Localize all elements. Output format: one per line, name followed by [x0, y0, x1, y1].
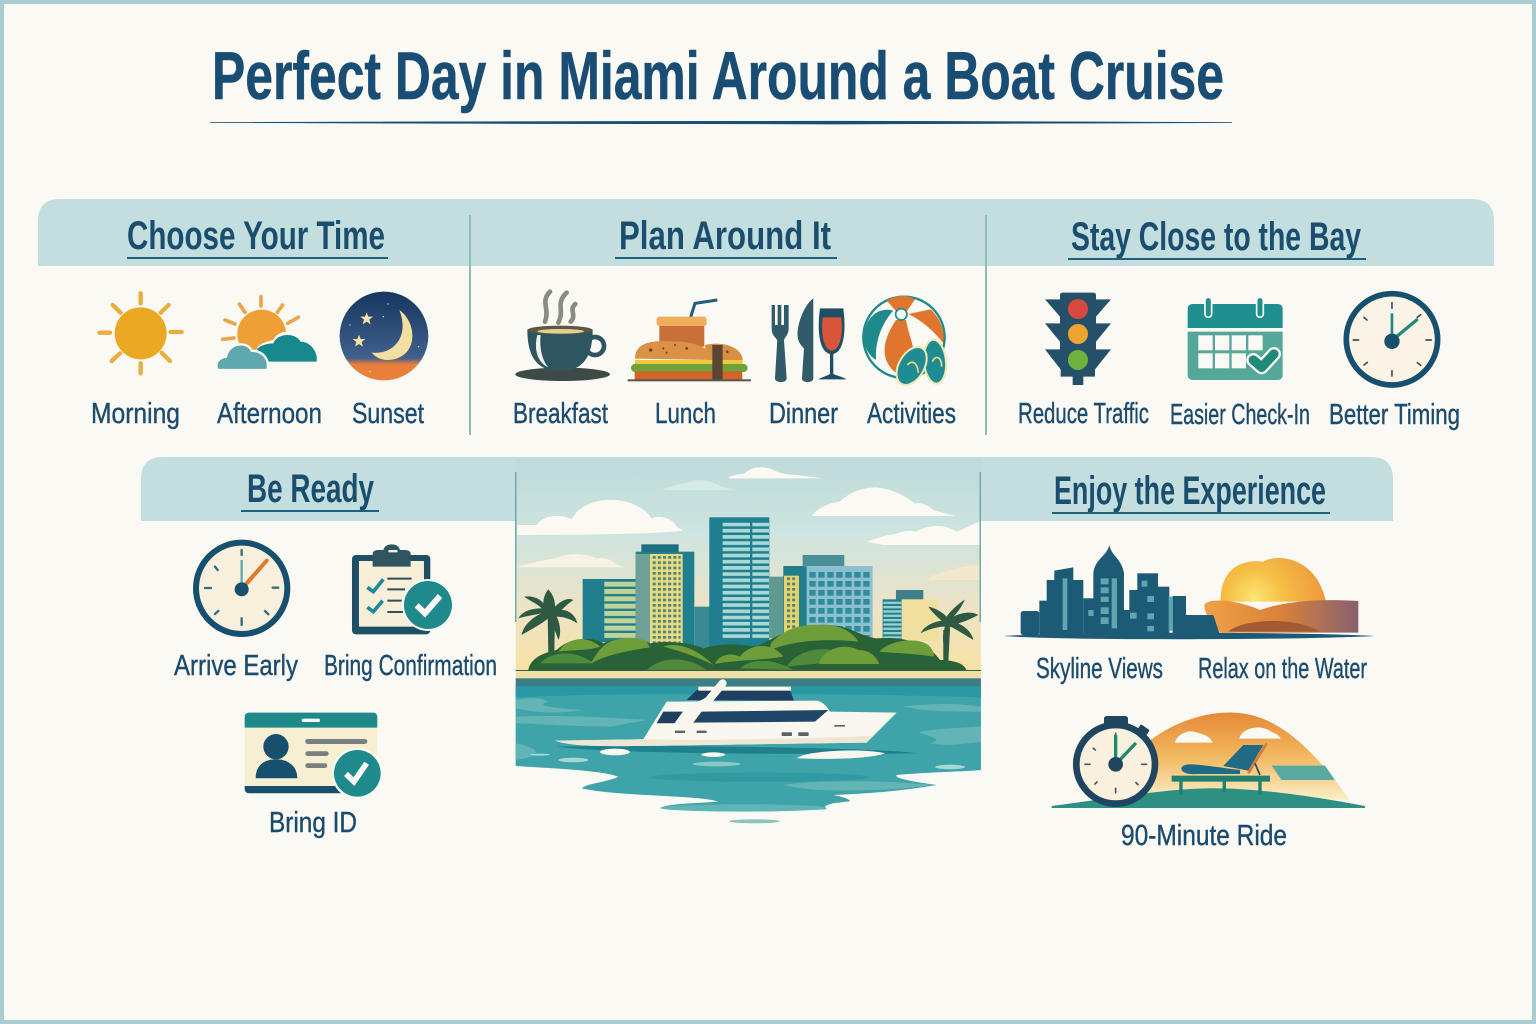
heading: plan around it: Plan Around It	[619, 214, 831, 258]
yacht	[555, 683, 918, 759]
label: sunset: Sunset	[352, 398, 424, 430]
panel: be ready	[174, 467, 497, 839]
label: afternoon: Afternoon	[217, 398, 322, 430]
label: lunch: Lunch	[655, 398, 716, 430]
icon: cutlery and wine	[772, 298, 847, 382]
label: dinner: Dinner	[769, 398, 838, 430]
palm trees	[518, 589, 978, 663]
icon: traffic light	[1045, 293, 1111, 385]
water	[516, 686, 981, 823]
icon: stopwatch and beach lounger	[1052, 713, 1365, 808]
label: reduce traffic: Reduce Traffic	[1018, 398, 1149, 430]
icon: beach ball and flip-flops	[863, 296, 948, 390]
panel: enjoy the experience	[1004, 469, 1375, 852]
panel: plan around it	[513, 214, 956, 430]
label: 90-minute ride: 90-Minute Ride	[1121, 820, 1287, 852]
heading: enjoy the experience: Enjoy the Experience	[1054, 469, 1326, 513]
icon: id card	[245, 713, 383, 799]
title underline	[210, 121, 1232, 124]
clouds	[517, 467, 981, 580]
icon: coffee cup	[515, 292, 610, 381]
label: skyline views: Skyline Views	[1036, 653, 1163, 685]
label: better timing: Better Timing	[1329, 399, 1460, 431]
icon: sunset over water	[1204, 558, 1358, 633]
icon: clipboard with check	[352, 544, 454, 634]
shoreline	[516, 671, 981, 686]
image edge line right	[980, 472, 981, 622]
label: breakfast: Breakfast	[513, 398, 608, 430]
label: activities: Activities	[867, 398, 956, 430]
heading underline	[1068, 258, 1366, 260]
label: arrive early: Arrive Early	[174, 650, 298, 682]
tree line	[516, 625, 981, 671]
heading: be ready: Be Ready	[247, 467, 375, 511]
heading underline	[127, 257, 388, 259]
icon: calendar with check	[1188, 297, 1283, 380]
label: bring id: Bring ID	[269, 807, 357, 839]
icon: skyline silhouette	[1004, 545, 1375, 639]
buildings	[583, 517, 938, 649]
heading underline	[241, 510, 379, 512]
image edge line left	[515, 472, 516, 622]
lower header band	[141, 457, 1393, 521]
label: easier check-in: Easier Check-In	[1170, 399, 1310, 431]
heading: stay close to the bay: Stay Close to the Bay	[1071, 215, 1362, 259]
icon: burger and drink	[628, 300, 751, 381]
top header band	[38, 199, 1494, 266]
label: morning: Morning	[91, 398, 180, 430]
icon: arrive early clock	[196, 543, 287, 634]
heading underline	[615, 257, 837, 259]
divider right	[985, 215, 987, 435]
panel: choose your time	[91, 214, 428, 430]
label: bring confirmation: Bring Confirmation	[324, 650, 497, 682]
divider left	[469, 215, 471, 435]
label: relax on the water: Relax on the Water	[1198, 653, 1367, 685]
icon: afternoon sun and clouds	[216, 297, 319, 370]
panel: stay close to the bay	[1018, 215, 1460, 431]
icon: clock	[1346, 294, 1438, 385]
central illustration: miami skyline and yacht	[516, 458, 981, 823]
heading underline	[1052, 512, 1330, 514]
heading: choose your time: Choose Your Time	[127, 214, 385, 258]
icon: sunset moon	[340, 292, 428, 380]
icon: morning sun	[99, 293, 182, 373]
sky	[516, 458, 981, 671]
